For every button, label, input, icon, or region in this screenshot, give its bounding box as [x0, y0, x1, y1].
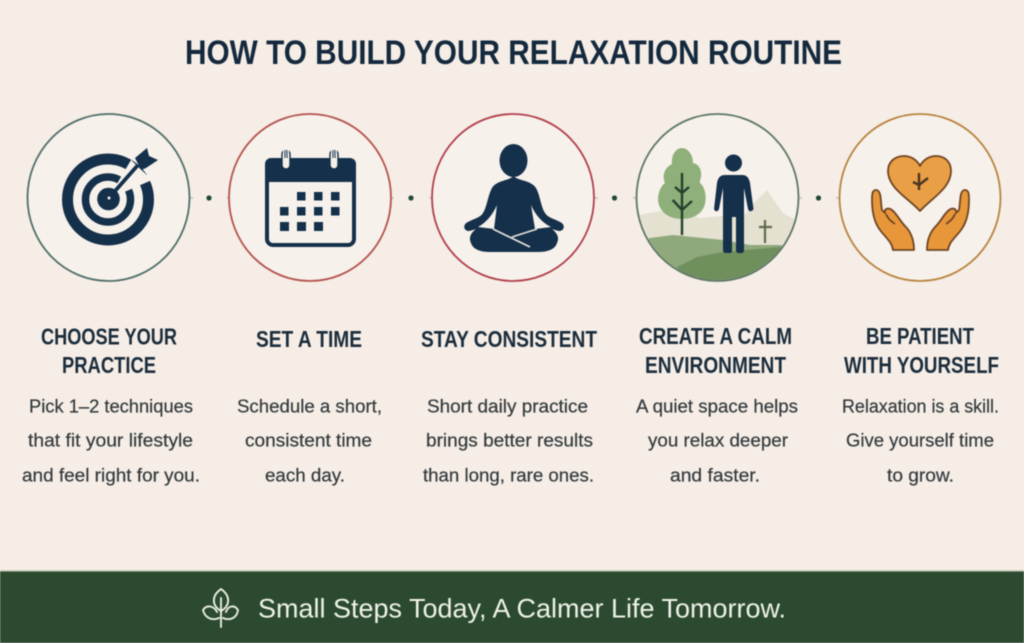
- description: you relax deeper: [648, 430, 788, 450]
- description: [842, 396, 999, 486]
- description: Relaxation is a skill.: [842, 396, 999, 416]
- heading: BE PATIENT: [866, 323, 974, 349]
- description: consistent time: [245, 430, 372, 450]
- step 5: be patient with yourself: [840, 114, 1000, 486]
- icon: meditating figure: [432, 114, 594, 281]
- heading: STAY CONSISTENT: [421, 326, 597, 352]
- heading: [844, 323, 999, 378]
- heading: CREATE A CALM: [639, 323, 792, 349]
- step 2: set a time: [229, 114, 391, 486]
- title: HOW TO BUILD YOUR RELAXATION ROUTINE: [185, 34, 842, 72]
- icon: leaf sprout: [203, 589, 238, 627]
- description: [423, 396, 594, 486]
- description: than long, rare ones.: [423, 464, 594, 486]
- step 1: choose your practice: [22, 114, 200, 486]
- description: Pick 1–2 techniques: [29, 396, 193, 416]
- icon: person and tree in landscape: [636, 114, 800, 285]
- description: to grow.: [887, 464, 954, 486]
- description: A quiet space helps: [636, 396, 798, 416]
- description: brings better results: [426, 430, 593, 450]
- description: that fit your lifestyle: [28, 430, 193, 450]
- description: each day.: [265, 464, 345, 486]
- icon: hands holding heart: [840, 114, 1000, 281]
- description: Short daily practice: [427, 396, 588, 416]
- description: Schedule a short,: [237, 396, 382, 416]
- step 3: stay consistent: [421, 114, 597, 486]
- icon: target with arrow: [28, 114, 190, 281]
- description: [237, 396, 382, 486]
- tagline: Small Steps Today, A Calmer Life Tomorrow.: [258, 594, 786, 624]
- description: and faster.: [670, 464, 760, 486]
- description: Give yourself time: [846, 430, 994, 450]
- description: [636, 396, 798, 486]
- connector ticks: [189, 197, 840, 199]
- connector dots: [206, 195, 821, 201]
- heading: [639, 323, 792, 378]
- heading: CHOOSE YOUR: [41, 324, 177, 350]
- description: and feel right for you.: [22, 464, 200, 486]
- icon: calendar: [229, 114, 391, 281]
- heading: ENVIRONMENT: [645, 352, 786, 378]
- heading: [41, 324, 177, 378]
- heading: PRACTICE: [62, 352, 156, 378]
- footer banner: [0, 570, 1024, 643]
- step 4: create a calm environment: [636, 114, 800, 486]
- description: [22, 396, 200, 486]
- heading: SET A TIME: [256, 326, 362, 352]
